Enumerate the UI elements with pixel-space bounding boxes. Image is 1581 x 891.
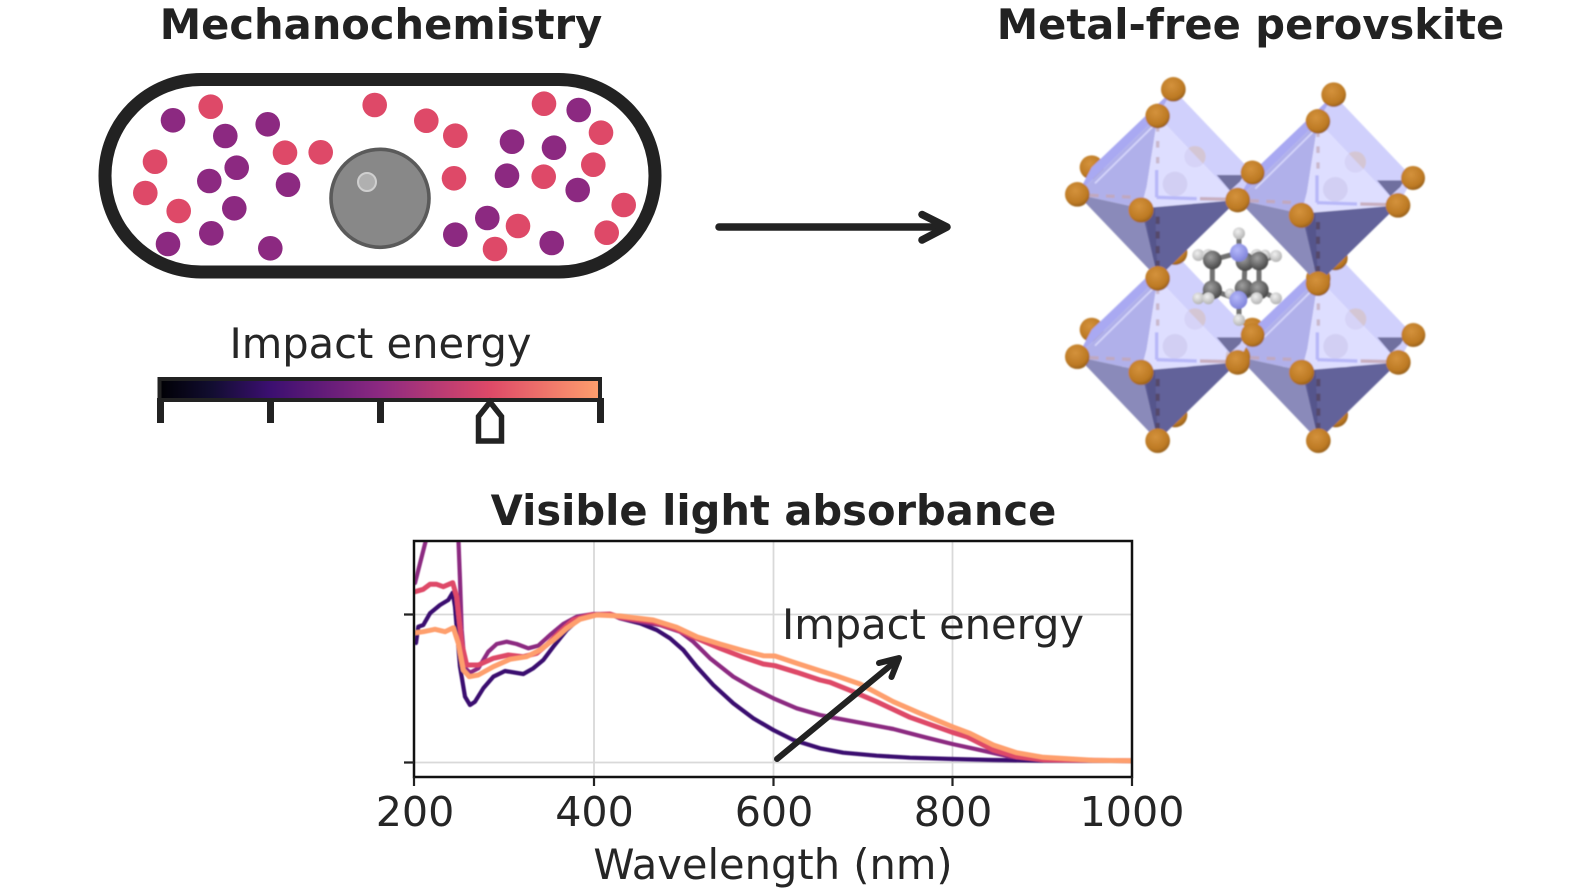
gradient bar — [160, 379, 600, 400]
jar outline — [105, 80, 655, 272]
octahedron: top right — [1225, 82, 1425, 296]
label: Impact energy (colour bar): Impact energy — [229, 319, 532, 368]
perovskite crystal structure — [1065, 77, 1425, 453]
curve: low impact energy — [415, 542, 1038, 763]
piperazine-like organic cation — [1192, 227, 1282, 326]
annotation arrow: increasing impact energy — [777, 658, 899, 759]
low-energy purple particles — [156, 98, 591, 261]
title: Mechanochemistry: Mechanochemistry — [160, 0, 602, 49]
curve: high impact energy — [415, 583, 1132, 761]
x tick labels: 600 — [735, 788, 813, 836]
x tick labels: 400 — [555, 788, 634, 836]
octahedron: bottom right — [1226, 239, 1425, 453]
high-energy red particles — [133, 91, 636, 261]
milling ball — [331, 149, 429, 247]
x tick labels: 1000 — [1080, 788, 1184, 836]
x axis label: Wavelength (nm) — [593, 840, 953, 889]
octahedron: bottom left — [1065, 239, 1265, 453]
panel: milling jar with particles — [105, 80, 655, 272]
title: Visible light absorbance: Visible light absorbance — [491, 486, 1056, 535]
curve: lowest impact energy — [416, 593, 1132, 761]
marker — [478, 402, 502, 441]
line chart: absorbance against wavelength — [376, 536, 1184, 889]
colour bar with ticks and marker — [160, 379, 600, 441]
grid lines — [414, 541, 1132, 777]
annotation label: Impact energy: Impact energy — [782, 600, 1084, 649]
title: Metal-free perovskite: Metal-free perovskite — [997, 0, 1504, 49]
arrow: process direction — [719, 214, 947, 240]
x tick labels: 800 — [914, 788, 992, 836]
octahedron: top left — [1065, 77, 1265, 291]
x tick labels — [376, 788, 1184, 836]
axes frame — [414, 541, 1132, 777]
curve: highest impact energy — [416, 615, 1132, 761]
x tick labels: 200 — [376, 788, 454, 836]
